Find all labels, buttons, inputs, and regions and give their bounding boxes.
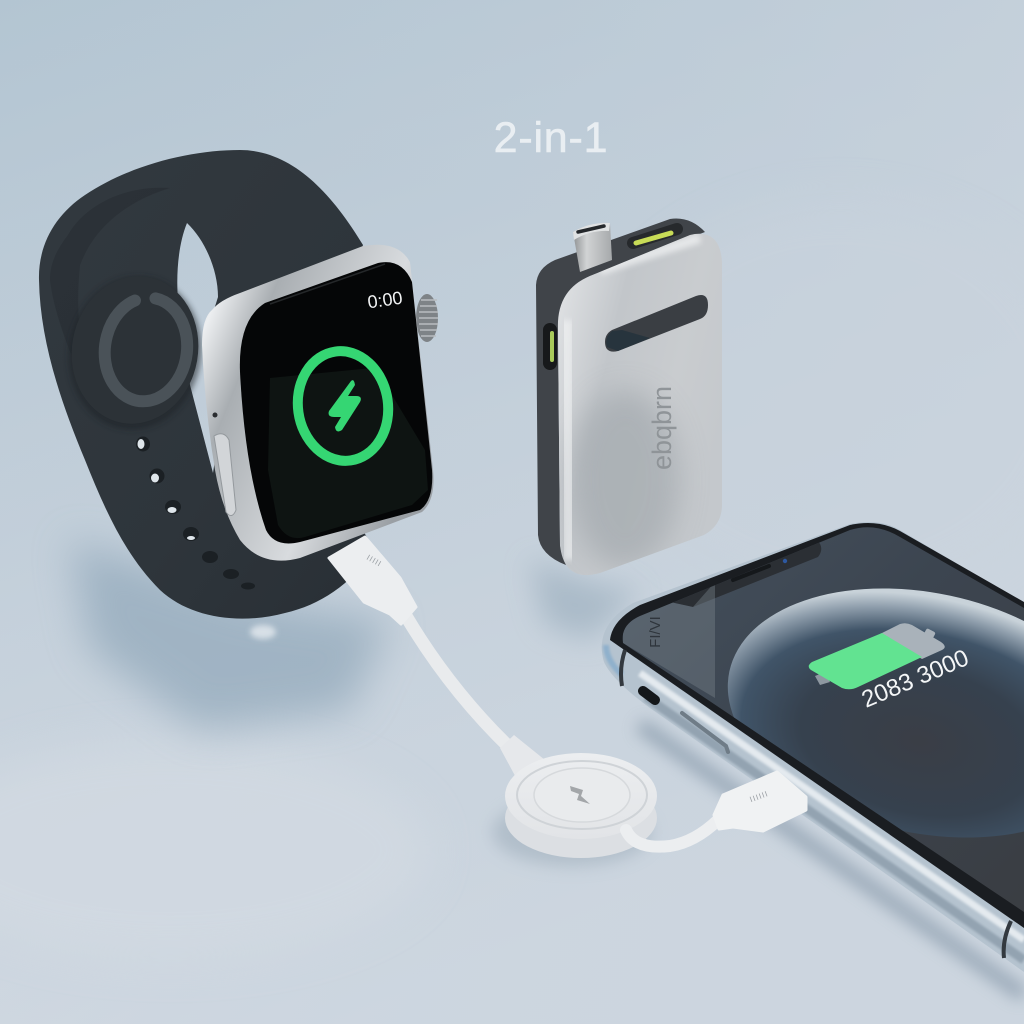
battery icon xyxy=(809,623,945,689)
watch case xyxy=(202,245,434,561)
watch connector marks: IIIII xyxy=(365,553,383,569)
side button xyxy=(212,412,236,516)
frame highlights xyxy=(606,645,1024,960)
watch xyxy=(39,150,438,619)
wallpaper orb xyxy=(728,588,1024,838)
charging ring xyxy=(291,345,395,467)
green side port xyxy=(543,323,557,370)
notch xyxy=(673,542,822,607)
connector marks: IIIIII xyxy=(749,789,770,804)
wireless charging puck xyxy=(492,753,657,866)
speaker xyxy=(733,566,769,580)
USB-C plug xyxy=(573,223,612,272)
charging bolt xyxy=(329,380,361,431)
strap holes xyxy=(136,436,255,590)
watch crown xyxy=(416,294,438,342)
watch reflection shadow xyxy=(70,540,390,730)
power bank side and top xyxy=(536,219,705,565)
phone frame xyxy=(602,522,1024,972)
phone shadow xyxy=(640,725,1024,995)
engraved brand: ebqbrn xyxy=(647,386,677,470)
time text: 0:00 xyxy=(366,288,404,312)
power bank shadow xyxy=(530,560,640,640)
green top port xyxy=(633,229,677,243)
power bank front xyxy=(558,234,722,575)
cable to phone xyxy=(626,772,806,847)
phone display xyxy=(622,527,1024,912)
watch screen xyxy=(240,262,432,544)
watch band xyxy=(39,150,375,619)
port and button xyxy=(621,650,1011,958)
cable to watch xyxy=(329,537,545,785)
phone xyxy=(600,505,1024,972)
phone bezel xyxy=(610,523,1024,928)
battery text: 2083 3000 xyxy=(858,644,973,714)
power bank xyxy=(530,219,722,640)
glare strip xyxy=(623,582,715,698)
mirrored reflection text: FI/VI xyxy=(647,616,664,648)
front slot xyxy=(605,295,708,352)
camera xyxy=(783,559,787,563)
title: 2-in-1 xyxy=(494,114,608,162)
puck bolt xyxy=(570,786,590,804)
strap button disc xyxy=(57,266,213,440)
